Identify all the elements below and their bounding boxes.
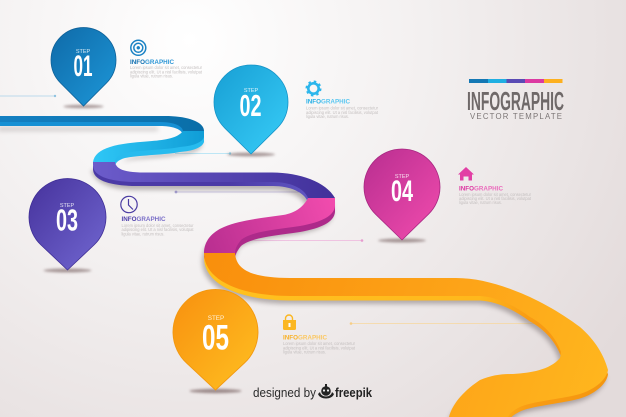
pin 4 [364, 149, 440, 242]
pin shadow [64, 105, 104, 108]
road [0, 116, 608, 417]
step label: STEP [76, 49, 91, 55]
pin 1 [51, 28, 116, 108]
road shadows [0, 127, 606, 417]
heading: INFOGRAPHIC [306, 99, 350, 106]
pin 2 [214, 65, 288, 156]
body text: Lorem ipsum dolor sit amet, consectetur [459, 192, 532, 197]
pin shadow [378, 238, 426, 242]
purple segment [93, 162, 335, 198]
icon: freepik [318, 384, 334, 398]
blue segment [0, 116, 204, 131]
info block 4 [458, 167, 532, 205]
body text [459, 192, 532, 205]
orange segment [204, 253, 608, 417]
body text: adipiscing elit. Ut a nisl facilisis, volutpat [122, 227, 194, 232]
step number: 02 [240, 88, 262, 123]
orange wall [204, 258, 608, 417]
icon: house [458, 167, 474, 180]
cyan segment [93, 131, 204, 162]
heading: INFOGRAPHIC [122, 216, 166, 223]
heading: INFOGRAPHIC [283, 334, 327, 342]
body text: ligula vitae, rutrum risus. [122, 231, 164, 236]
body text: ligula vitae, rutrum risus. [459, 200, 502, 205]
body text: Lorem ipsum dolor sit amet, consectetur [306, 106, 379, 110]
purple wall [93, 166, 335, 202]
title block [467, 79, 564, 121]
body text: ligula vitae, rutrum risus. [306, 114, 349, 119]
body text [122, 223, 194, 236]
step number: 05 [202, 318, 229, 358]
step label: STEP [208, 315, 224, 322]
pin body [51, 28, 116, 106]
pin shadow [227, 152, 275, 156]
body text [306, 106, 379, 119]
icon: clock [121, 196, 137, 213]
step label: STEP [395, 174, 410, 180]
body text: adipiscing elit. Ut a nisl facilisis, volutpat [130, 69, 203, 74]
step number: 04 [391, 175, 413, 208]
info block 3 [121, 196, 194, 236]
step label: STEP [60, 203, 75, 209]
pin body [214, 65, 288, 154]
blue wall [0, 120, 204, 135]
icon: target [131, 40, 146, 55]
pin body [173, 289, 258, 390]
magenta segment [204, 198, 335, 253]
heading: INFOGRAPHIC [130, 59, 174, 66]
info block 2 [306, 82, 379, 119]
freepik: freepik [335, 385, 373, 400]
pin body [29, 179, 106, 270]
body text [283, 341, 356, 354]
pin 3 [29, 179, 106, 272]
icon: gear [306, 82, 320, 96]
body text: ligula vitae, rutrum risus. [130, 74, 173, 79]
body text: adipiscing elit. Ut a nisl facilisis, volutpat [459, 196, 532, 201]
step number: 03 [56, 202, 78, 238]
connector lines [0, 95, 535, 325]
body text: adipiscing elit. Ut a nisl facilisis, volutpat [283, 345, 356, 350]
pin shadow [44, 268, 92, 272]
subtitle: VECTOR TEMPLATE [470, 112, 562, 121]
pin shadow [190, 389, 242, 393]
designed by: designed by [253, 386, 317, 400]
body text: Lorem ipsum dolor sit amet, consectetur [122, 223, 194, 228]
magenta wall [204, 204, 335, 259]
step label: STEP [244, 88, 259, 94]
body text: Lorem ipsum dolor sit amet, consectetur [130, 65, 203, 70]
cyan wall [93, 136, 204, 167]
heading: INFOGRAPHIC [459, 186, 503, 192]
body text: Lorem ipsum dolor sit amet, consectetur [283, 341, 356, 346]
info block 5 [283, 315, 356, 354]
info block 1 [130, 40, 203, 79]
colour bar [469, 79, 562, 83]
icon: padlock [283, 315, 296, 330]
pin body [364, 149, 440, 240]
step number: 01 [74, 50, 92, 83]
pin 5 [173, 289, 258, 393]
credit [253, 384, 373, 400]
body text: adipiscing elit. Ut a nisl facilisis, volutpat [306, 110, 379, 115]
body text: ligula vitae, rutrum risus. [283, 350, 326, 354]
body text [130, 65, 203, 79]
